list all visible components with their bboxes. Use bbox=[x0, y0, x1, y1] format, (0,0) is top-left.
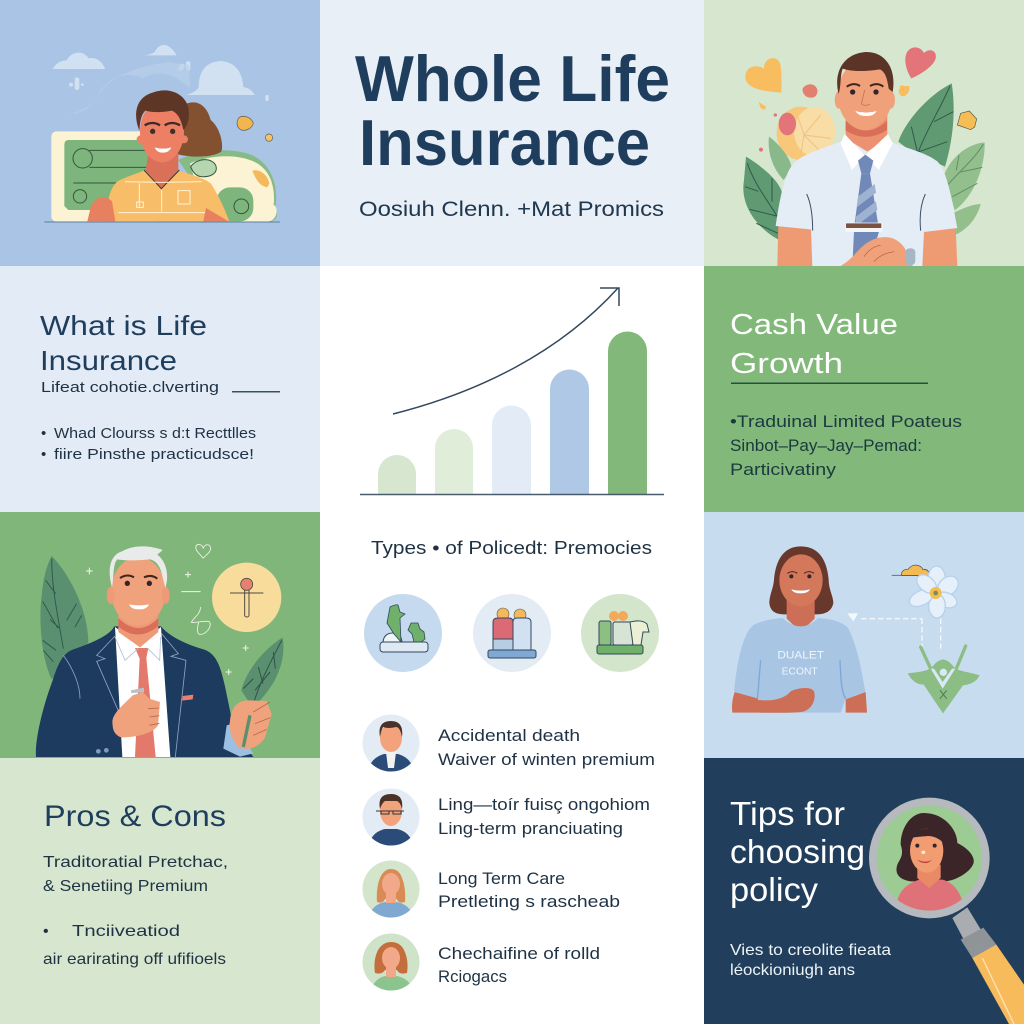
panel: rider list bbox=[362, 714, 655, 992]
bullets bbox=[41, 425, 256, 463]
hearts bbox=[745, 47, 977, 152]
yellow blobs bbox=[237, 116, 253, 130]
heading: What is Life bbox=[40, 310, 207, 341]
bullet text bbox=[43, 923, 226, 968]
text: rider two: Ling—toír fuisç ongohiom bbox=[438, 795, 650, 814]
leaves bbox=[743, 83, 985, 240]
subtitle: Oosiuh Clenn. +Mat Promics bbox=[359, 198, 664, 221]
heading: Types • of Policedt: Premocies bbox=[371, 538, 652, 558]
rule bbox=[731, 382, 928, 384]
hand-held leaf bbox=[230, 637, 283, 749]
avatar: woman with blonde hair bbox=[362, 860, 420, 918]
panel: pros and cons bbox=[0, 758, 320, 1024]
icon: magnifying glass with woman bbox=[869, 798, 1024, 1024]
body text bbox=[730, 413, 962, 479]
text: rider two bbox=[438, 795, 650, 838]
bullet text: air earirating off ufifioels bbox=[43, 951, 226, 968]
heading bbox=[730, 795, 865, 908]
title text: Insurance bbox=[359, 106, 650, 179]
bullets: • bbox=[41, 425, 46, 442]
panel: top-right illustration bbox=[704, 0, 1024, 266]
panel: businessman illustration bbox=[0, 512, 320, 758]
body text: Particivatiny bbox=[730, 461, 837, 479]
body text: Sinbot–Pay–Jay–Pemad: bbox=[730, 437, 922, 455]
heading: Pros & Cons bbox=[44, 800, 226, 833]
clouds bbox=[53, 45, 269, 101]
woman: ECONT bbox=[782, 666, 818, 677]
avatar: man in suit bbox=[362, 714, 420, 772]
man bbox=[36, 546, 253, 757]
heading: Tips for bbox=[730, 795, 845, 832]
panel: growth chart bbox=[360, 288, 664, 494]
icon: policy one bbox=[364, 594, 442, 672]
text: rider four: Chechaifine of rolld bbox=[438, 944, 600, 963]
heading: Cash Value bbox=[730, 309, 898, 341]
panel: what is life insurance bbox=[0, 266, 320, 512]
body text: & Senetiing Premium bbox=[43, 878, 208, 895]
money card bbox=[51, 131, 158, 222]
heading bbox=[730, 309, 898, 380]
body text: Vies to creolite fieata bbox=[730, 942, 891, 959]
body text: léockioniugh ans bbox=[730, 962, 855, 979]
panel: cash value growth bbox=[704, 266, 1024, 512]
title text bbox=[355, 42, 670, 179]
bullets: fiire Pinsthe practicudsce! bbox=[54, 446, 254, 463]
bullets: Whad Clourss s d:t Recttlles bbox=[54, 425, 256, 442]
text: rider one bbox=[438, 726, 655, 769]
flower bbox=[892, 565, 962, 618]
title text: Whole Life bbox=[355, 42, 670, 115]
text: rider one: Waiver of winten premium bbox=[438, 750, 655, 769]
text: rider three bbox=[438, 869, 620, 911]
icon: policy two bbox=[473, 594, 551, 672]
faint swoosh bbox=[67, 62, 190, 115]
avatar: man with glasses bbox=[362, 788, 420, 846]
growth arrow bbox=[393, 288, 619, 414]
panel: top-left illustration bbox=[0, 0, 320, 266]
bullet text: Tnciiveatiod bbox=[72, 923, 180, 940]
text: rider three: Pretleting s rascheab bbox=[438, 892, 620, 911]
baseline bbox=[44, 220, 280, 223]
woman bbox=[732, 546, 867, 713]
panel: tips for choosing policy bbox=[704, 758, 1024, 1024]
sparkles bbox=[86, 568, 249, 675]
icon: policy three bbox=[581, 594, 659, 672]
body text bbox=[43, 854, 228, 895]
man bbox=[776, 52, 957, 266]
body text: •Traduinal Limited Poateus bbox=[730, 413, 962, 431]
text: rider two: Ling-term pranciuating bbox=[438, 819, 623, 838]
person bbox=[87, 90, 229, 221]
heading: choosing bbox=[730, 833, 865, 870]
avatar: woman with auburn hair bbox=[362, 934, 420, 992]
text: rider four bbox=[438, 944, 600, 986]
text: rider four: Rciogacs bbox=[438, 967, 507, 986]
bullets: • bbox=[41, 446, 46, 463]
text: rider three: Long Term Care bbox=[438, 869, 565, 888]
pin badge bbox=[212, 563, 281, 632]
heading bbox=[40, 310, 207, 376]
panel: shirt woman illustration bbox=[704, 512, 1024, 758]
panel: title bbox=[320, 0, 704, 266]
heading: Growth bbox=[730, 348, 843, 380]
heading: policy bbox=[730, 871, 819, 908]
axis bbox=[360, 494, 664, 496]
arrowhead bbox=[847, 613, 858, 621]
body text: Traditoratial Pretchac, bbox=[43, 854, 228, 871]
background leaf bbox=[40, 556, 88, 679]
bars bbox=[378, 332, 647, 494]
text: rider one: Accidental death bbox=[438, 726, 580, 745]
panel: types of policies bbox=[364, 538, 659, 672]
green shield bbox=[908, 646, 980, 713]
body text bbox=[730, 942, 891, 979]
round coin shape bbox=[178, 150, 277, 222]
dashed connectors bbox=[861, 619, 941, 649]
bullet text: • bbox=[43, 923, 49, 940]
heading: Insurance bbox=[40, 345, 177, 376]
fruit bbox=[777, 107, 835, 160]
subheading: Lifeat cohotie.clverting bbox=[41, 380, 219, 396]
woman: DUALET bbox=[777, 650, 824, 662]
